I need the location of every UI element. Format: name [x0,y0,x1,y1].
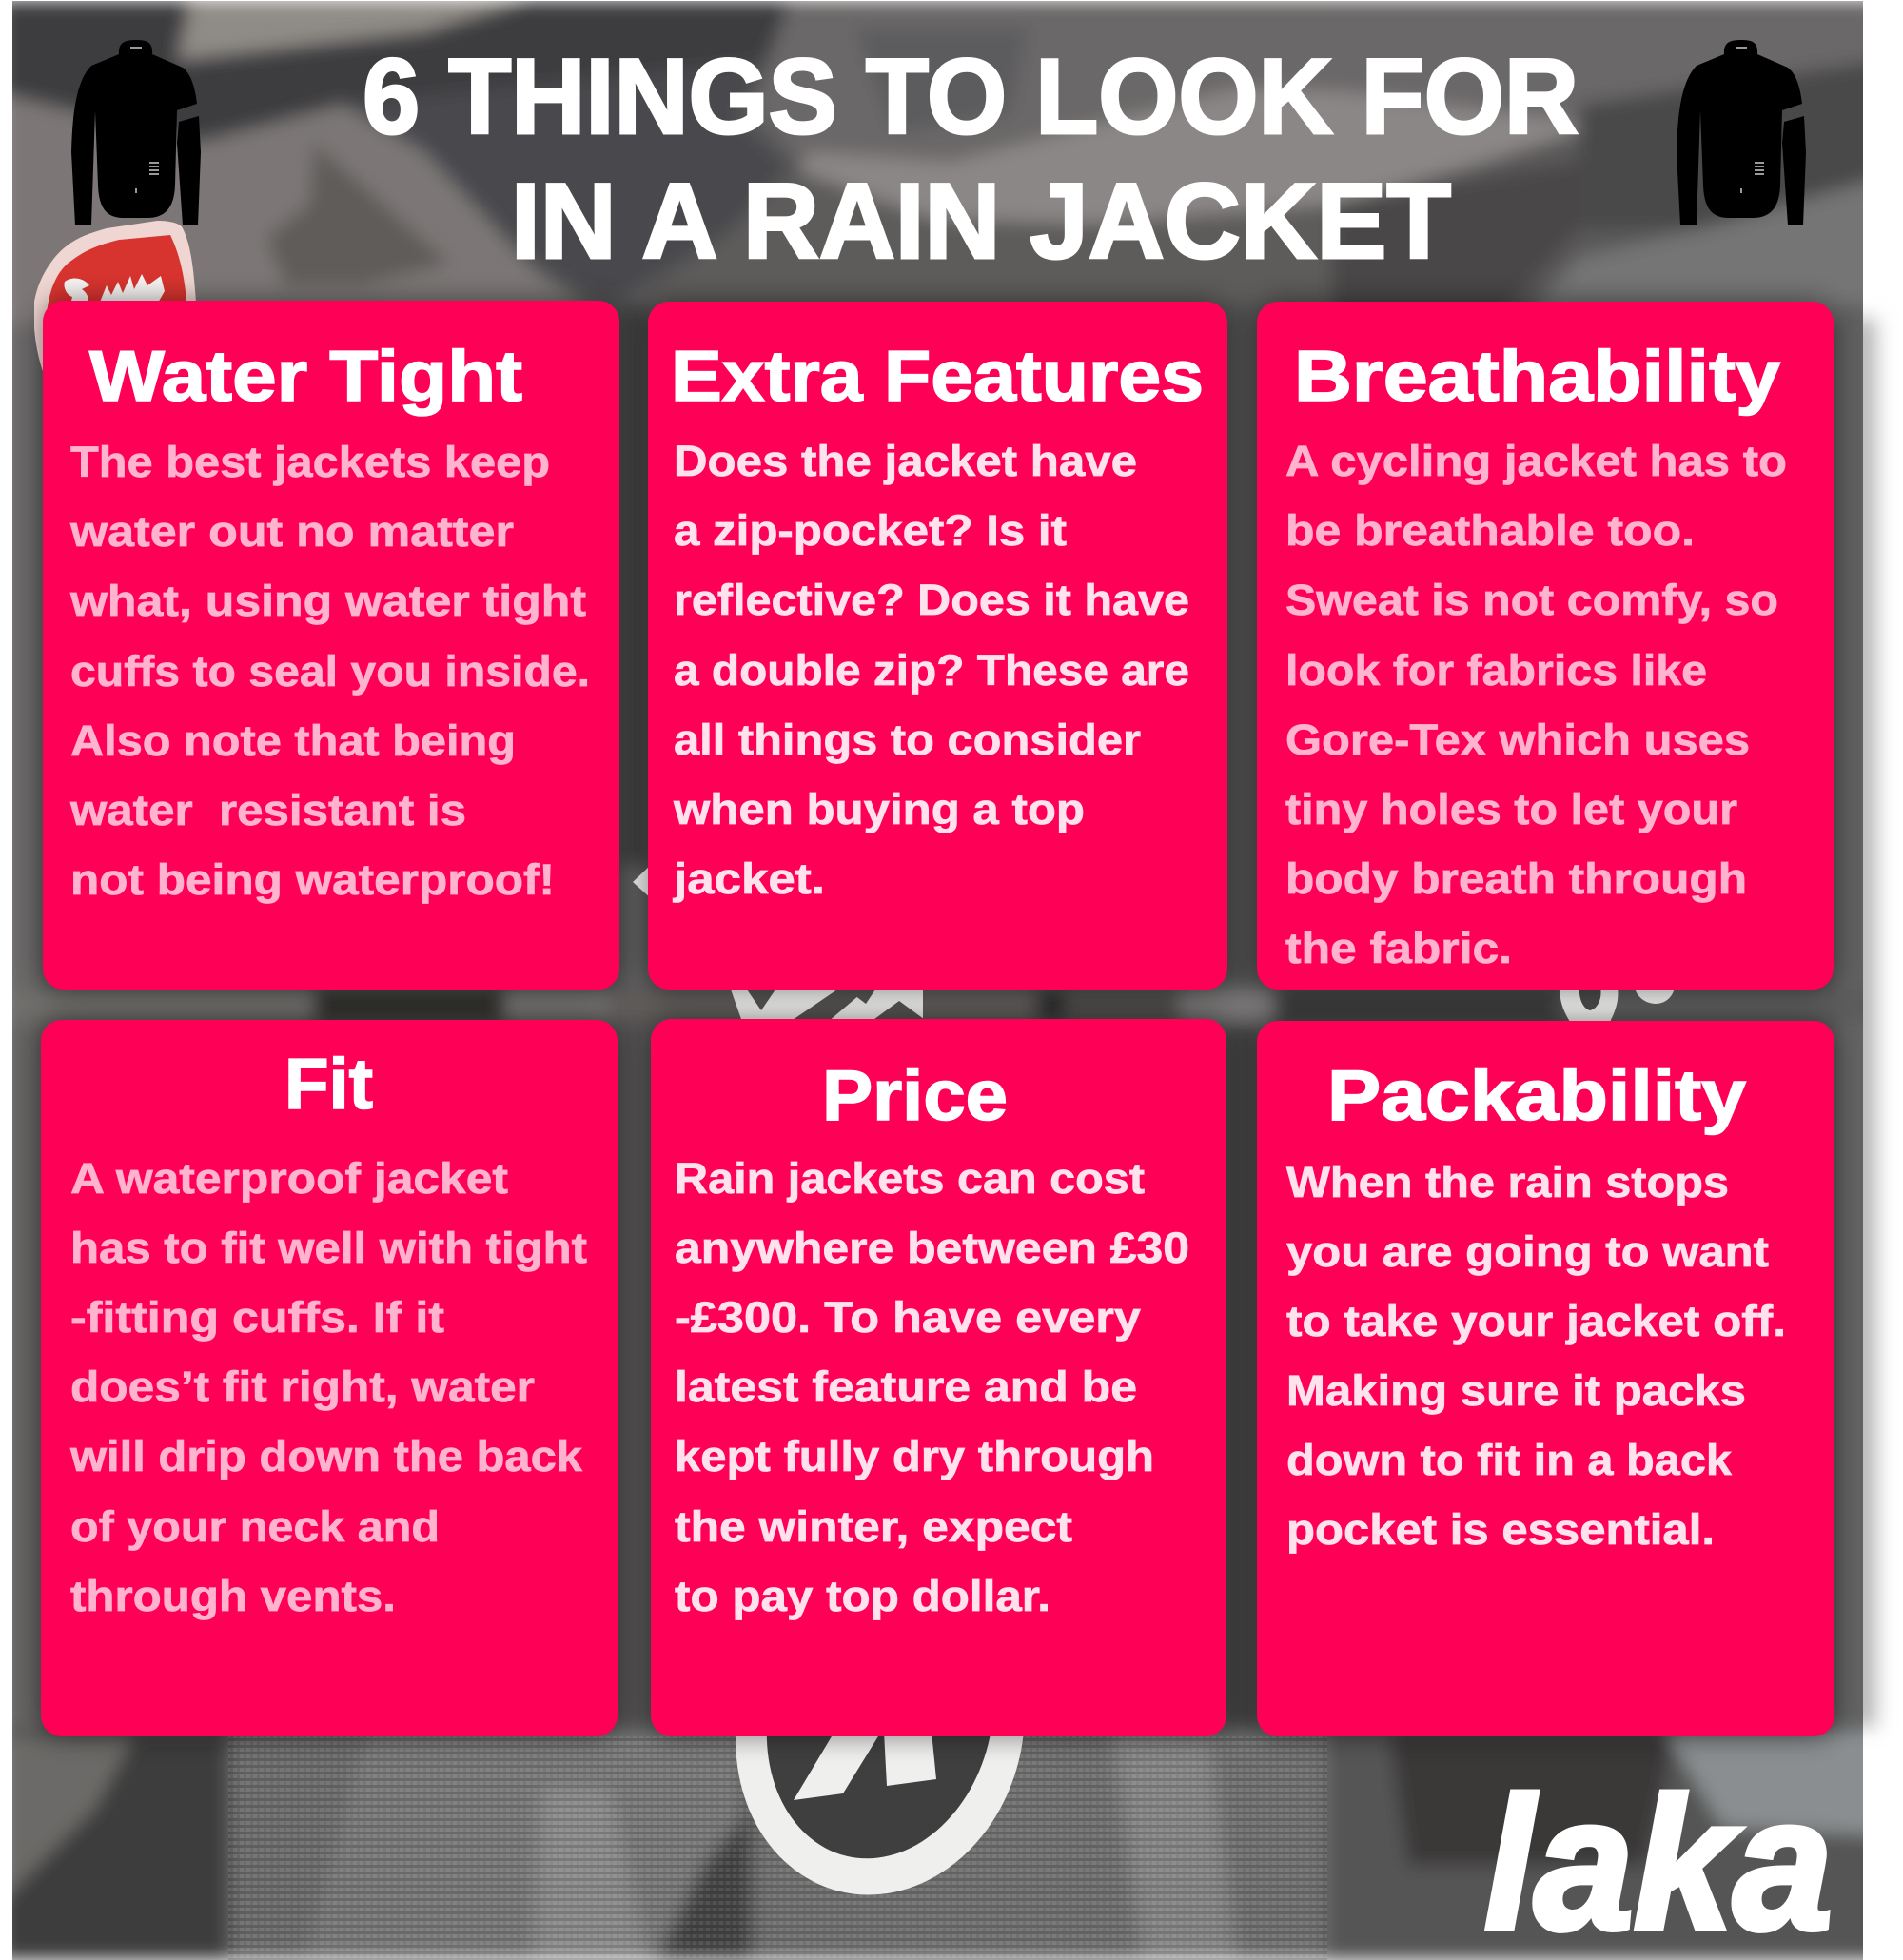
text block: extra features: reflective? Does it have [674,576,1189,624]
text block: price: Rain jackets can cost [675,1154,1145,1203]
panel: price [651,1019,1226,1736]
heading: water tight: Water Tight [89,336,522,416]
text block: breathability: A cycling jacket has to [1285,437,1787,485]
red sponsor badge on fabric [34,221,196,371]
text block: breathability: be breathable too. [1285,506,1695,555]
woven fabric texture [228,1736,1327,1960]
text block: extra features: all things to consider [674,715,1141,764]
text block: packability: down to fit in a back [1286,1436,1733,1484]
text block: packability: When the rain stops [1286,1158,1729,1206]
text block: extra features: Does the jacket have [674,437,1137,485]
text block: water tight: The best jackets keep [70,438,550,486]
text block: water tight: not being waterproof! [70,855,555,904]
text block: fit: will drip down the back [69,1432,583,1480]
text block: water tight [69,438,590,904]
text block: breathability: look for fabrics like [1285,646,1707,695]
icon: left jacket [71,40,201,225]
heading: packability: Packability [1327,1055,1746,1135]
text block: breathability: the fabric. [1285,924,1512,972]
title: IN A RAIN JACKET [511,162,1451,281]
text block: breathability: Gore-Tex which uses [1285,715,1750,764]
panel: extra features [648,302,1227,990]
text block: water tight: water out no matter [69,507,514,556]
text block: price [675,1154,1189,1620]
card drop shadows [41,301,1834,1736]
text block: fit: through vents. [70,1572,396,1620]
title [363,37,1579,281]
text block: fit: has to fit well with tight [70,1224,587,1272]
text block: water tight: cuffs to seal you inside. [70,647,590,696]
heading: breathability: Breathability [1294,336,1780,416]
text block: fit: of your neck and [70,1502,440,1551]
text block: fit: does’t fit right, water [70,1362,535,1411]
text block: packability: you are going to want [1286,1227,1769,1276]
text block: breathability [1285,437,1787,972]
heading: price: Price [822,1055,1008,1135]
text block: breathability: tiny holes to let your [1285,785,1737,833]
text block: extra features: a double zip? These are [674,646,1189,695]
panel: packability [1257,1021,1834,1736]
text block: extra features: a zip-pocket? Is it [674,506,1067,555]
fabric logo: ring and letter pieces [633,864,1675,1926]
text block: breathability: body breath through [1285,854,1747,903]
text block: fit [69,1154,587,1620]
panel: breathability [1257,302,1834,990]
text block: extra features: jacket. [673,854,825,903]
text block: price: kept fully dry through [675,1432,1154,1480]
text block: extra features: when buying a top [673,785,1085,833]
panel: fit [41,1020,618,1736]
text block: water tight: water resistant is [69,786,466,834]
text block: water tight: what, using water tight [69,577,586,625]
text block: fit: A waterproof jacket [70,1154,508,1203]
title: 6 THINGS TO LOOK FOR [363,37,1579,156]
text block: price: -£300. To have every [675,1293,1141,1342]
text block: price: the winter, expect [675,1502,1072,1551]
text block: extra features [673,437,1189,903]
text block: water tight: Also note that being [70,716,516,765]
panel: water tight [43,301,619,990]
heading: extra features: Extra Features [671,336,1204,416]
icon: right jacket [1677,40,1806,225]
text block: breathability: Sweat is not comfy, so [1285,576,1778,624]
text block: packability: Making sure it packs [1286,1366,1746,1415]
heading: fit: Fit [284,1044,373,1124]
text block: price: anywhere between £30 [675,1224,1189,1272]
text block: packability: to take your jacket off. [1286,1297,1786,1345]
white edge shadow right of the photo [1846,319,1876,1727]
text block: price: to pay top dollar. [675,1572,1050,1620]
text block: price: latest feature and be [675,1362,1137,1411]
text block: packability: pocket is essential. [1286,1505,1715,1554]
text block: fit: -fitting cuffs. If it [70,1293,444,1342]
text block: packability [1286,1158,1786,1554]
